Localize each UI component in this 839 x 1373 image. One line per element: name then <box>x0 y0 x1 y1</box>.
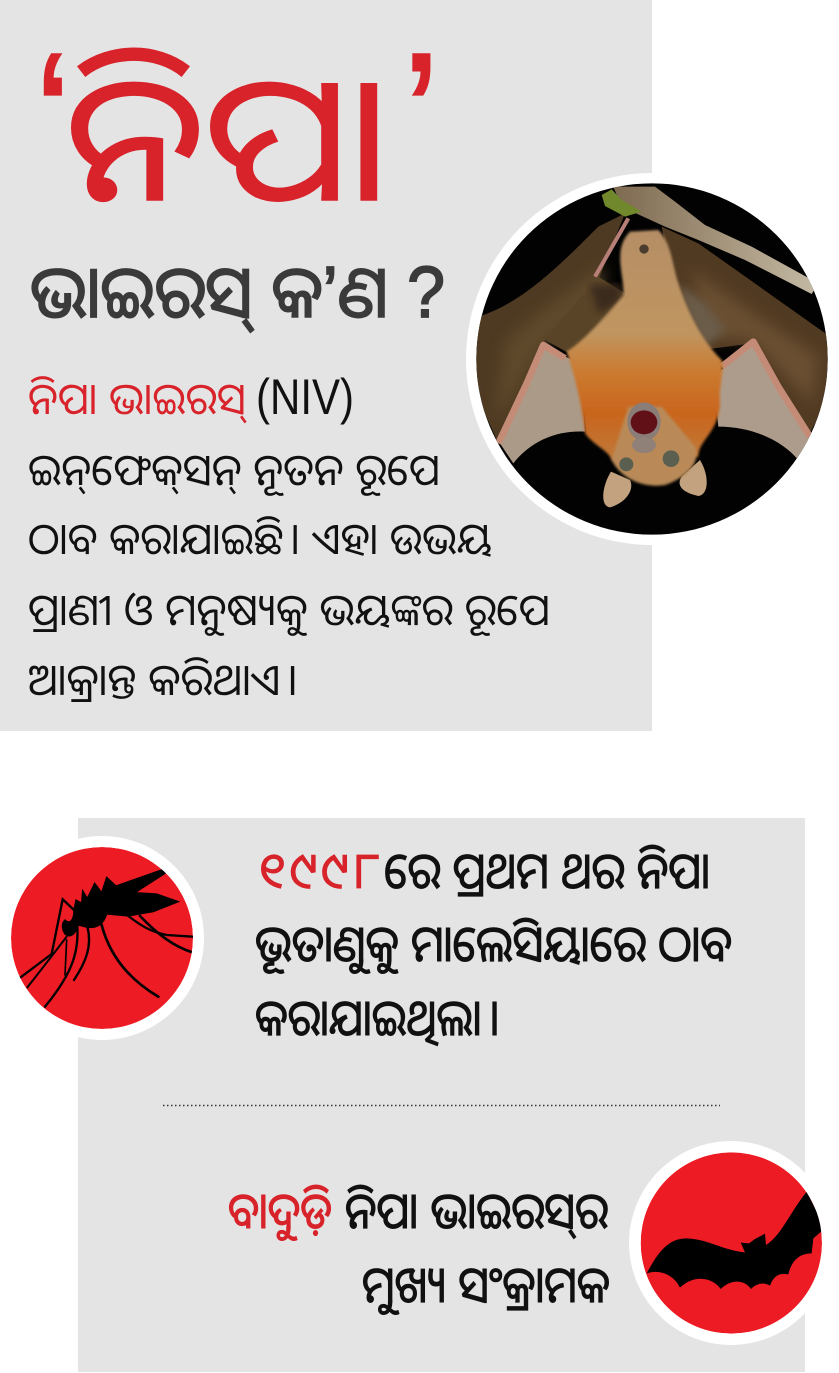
text block: 1998 first detection: କରାଯାଇଥିଲା। <box>255 990 500 1046</box>
mouth <box>627 402 661 441</box>
subtitle: ଭାଇରସ୍ କ’ଣ ? <box>30 253 445 333</box>
body fur <box>567 230 723 460</box>
branch <box>613 187 818 294</box>
icon: mosquito in red circle <box>0 836 204 1040</box>
bat silhouette <box>647 1192 825 1289</box>
text block: bats main carrier: ନିପା ଭାଇରସ୍‌ର <box>345 1183 608 1239</box>
text block: intro paragraph: (NIV) <box>256 369 354 425</box>
text block: 1998 first detection: ୧୯୯୮ <box>258 843 380 899</box>
text block: intro paragraph: ପ୍ରାଣୀ ଓ ମନୁଷ୍ୟକୁ ଭୟଙ୍କର ରୂପେ <box>28 586 550 636</box>
lower right membrane <box>713 343 810 460</box>
snout <box>632 439 656 453</box>
title: ନିପା <box>66 41 389 238</box>
panel: top intro background <box>0 0 652 731</box>
icon: bat silhouette in red circle <box>629 1141 833 1345</box>
mosquito legs <box>21 899 193 1007</box>
ears <box>603 472 631 507</box>
pink wing arms <box>498 345 565 443</box>
text block: bats main carrier: ବାଦୁଡ଼ି <box>228 1183 332 1241</box>
left wing <box>472 213 625 440</box>
text block: intro paragraph: ନିପା ଭାଇରସ୍ <box>28 375 247 424</box>
text block: 1998 first detection: ରେ ପ୍ରଥମ ଥର ନିପା <box>384 843 710 899</box>
text block: 1998 first detection: ଭୂତାଣୁକୁ ମାଲେସିୟାରେ ଠାବ <box>255 916 732 974</box>
head <box>612 407 696 486</box>
text block: 1998 first detection <box>255 843 732 1046</box>
moss <box>602 189 642 217</box>
text block: bats main carrier: ମୁଖ୍ୟ ସଂକ୍ରାମକ <box>362 1257 610 1315</box>
lower left membrane <box>500 347 585 463</box>
text block: intro paragraph: ଇନ୍‌ଫେକ୍‌ସନ୍ ନୂତନ ରୂପେ <box>28 446 440 496</box>
right wing <box>662 227 832 437</box>
eyes <box>619 457 633 471</box>
mosquito body <box>62 869 178 936</box>
text block: intro paragraph: ଠାବ କରାଯାଇଛି। ଏହା ଉଭୟ <box>28 515 492 564</box>
text block: intro paragraph <box>28 369 550 705</box>
text block: bats main carrier <box>228 1183 610 1315</box>
title: ’ <box>400 13 442 225</box>
title <box>32 13 442 238</box>
title: ‘ <box>32 13 74 225</box>
text block: intro paragraph: ଆକ୍ରାନ୍ତ କରିଥାଏ। <box>28 656 298 705</box>
photo: fruit bat hanging from a branch <box>465 170 839 547</box>
panel: bottom facts background <box>78 818 805 1372</box>
